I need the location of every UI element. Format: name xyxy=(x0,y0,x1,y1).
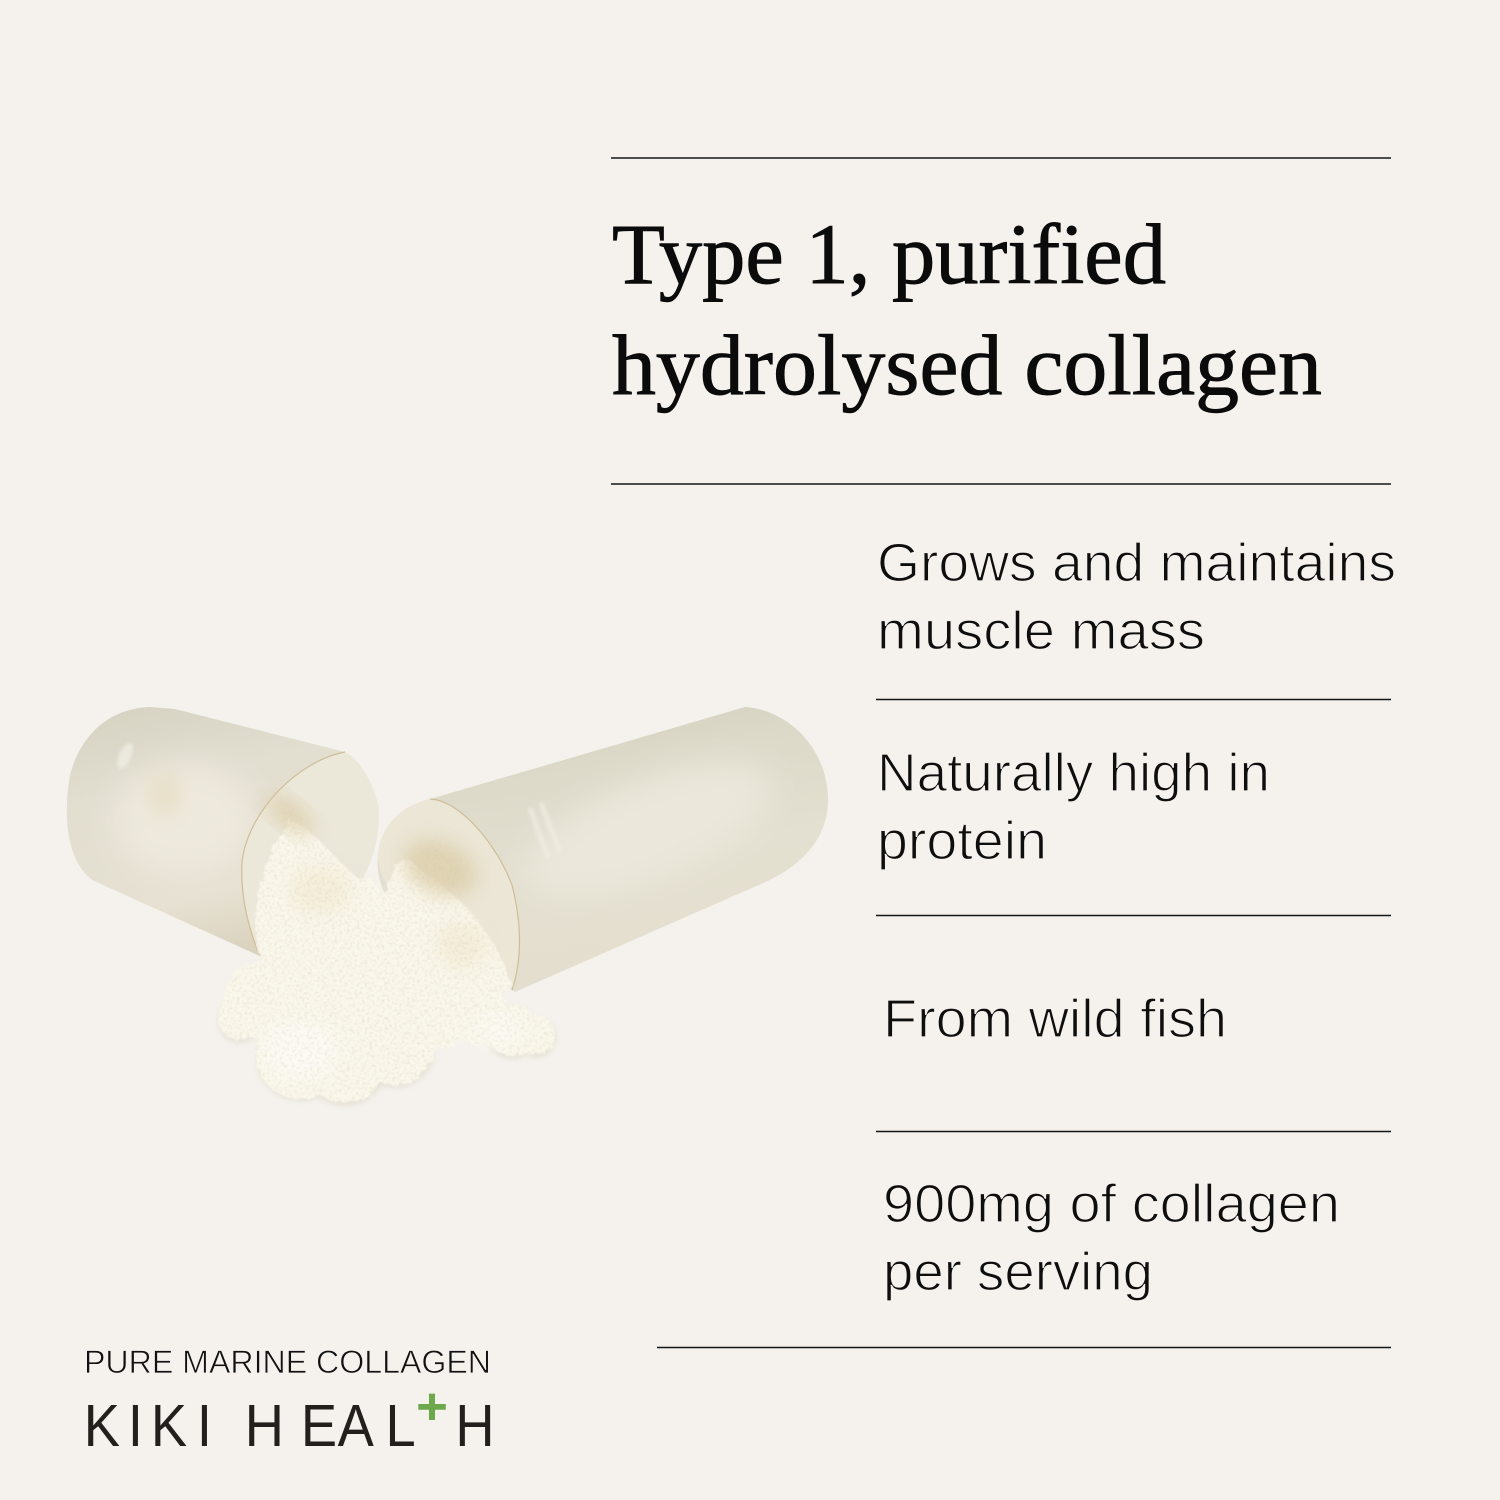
right capsule half xyxy=(377,707,828,992)
logo: Kiki Health: H xyxy=(455,1394,495,1460)
logo: Kiki Health: + xyxy=(416,1378,448,1436)
heading: Type 1, purified xyxy=(612,206,1166,302)
benefit: protein xyxy=(877,743,1270,871)
benefit: collagen per serving: 900mg of collagen xyxy=(883,1174,1340,1234)
right capsule mouth xyxy=(378,799,520,990)
logo: Kiki Health: HEAL xyxy=(245,1394,416,1460)
logo: Kiki Health xyxy=(84,1378,495,1460)
benefit: muscle mass: muscle mass xyxy=(877,601,1205,661)
logo: Kiki Health: KIKI xyxy=(84,1394,212,1460)
benefit: protein: protein xyxy=(877,811,1047,871)
infographic canvas xyxy=(66,157,1394,1446)
spilled powder xyxy=(218,787,555,1103)
left capsule mouth xyxy=(242,752,379,952)
benefit: muscle mass: Grows and maintains xyxy=(877,533,1396,593)
left capsule half xyxy=(67,707,379,957)
benefit: collagen per serving xyxy=(883,1174,1340,1302)
heading: hydrolysed collagen xyxy=(612,317,1322,413)
benefit: protein: Naturally high in xyxy=(877,743,1270,803)
image: open capsules with spilled powder xyxy=(67,707,828,1106)
product name: PURE MARINE COLLAGEN xyxy=(84,1344,491,1380)
benefit: wild fish: From wild fish xyxy=(883,989,1227,1049)
benefit: collagen per serving: per serving xyxy=(883,1242,1153,1302)
powder shadow xyxy=(218,999,556,1106)
benefit: muscle mass xyxy=(877,533,1396,661)
heading xyxy=(612,206,1322,413)
